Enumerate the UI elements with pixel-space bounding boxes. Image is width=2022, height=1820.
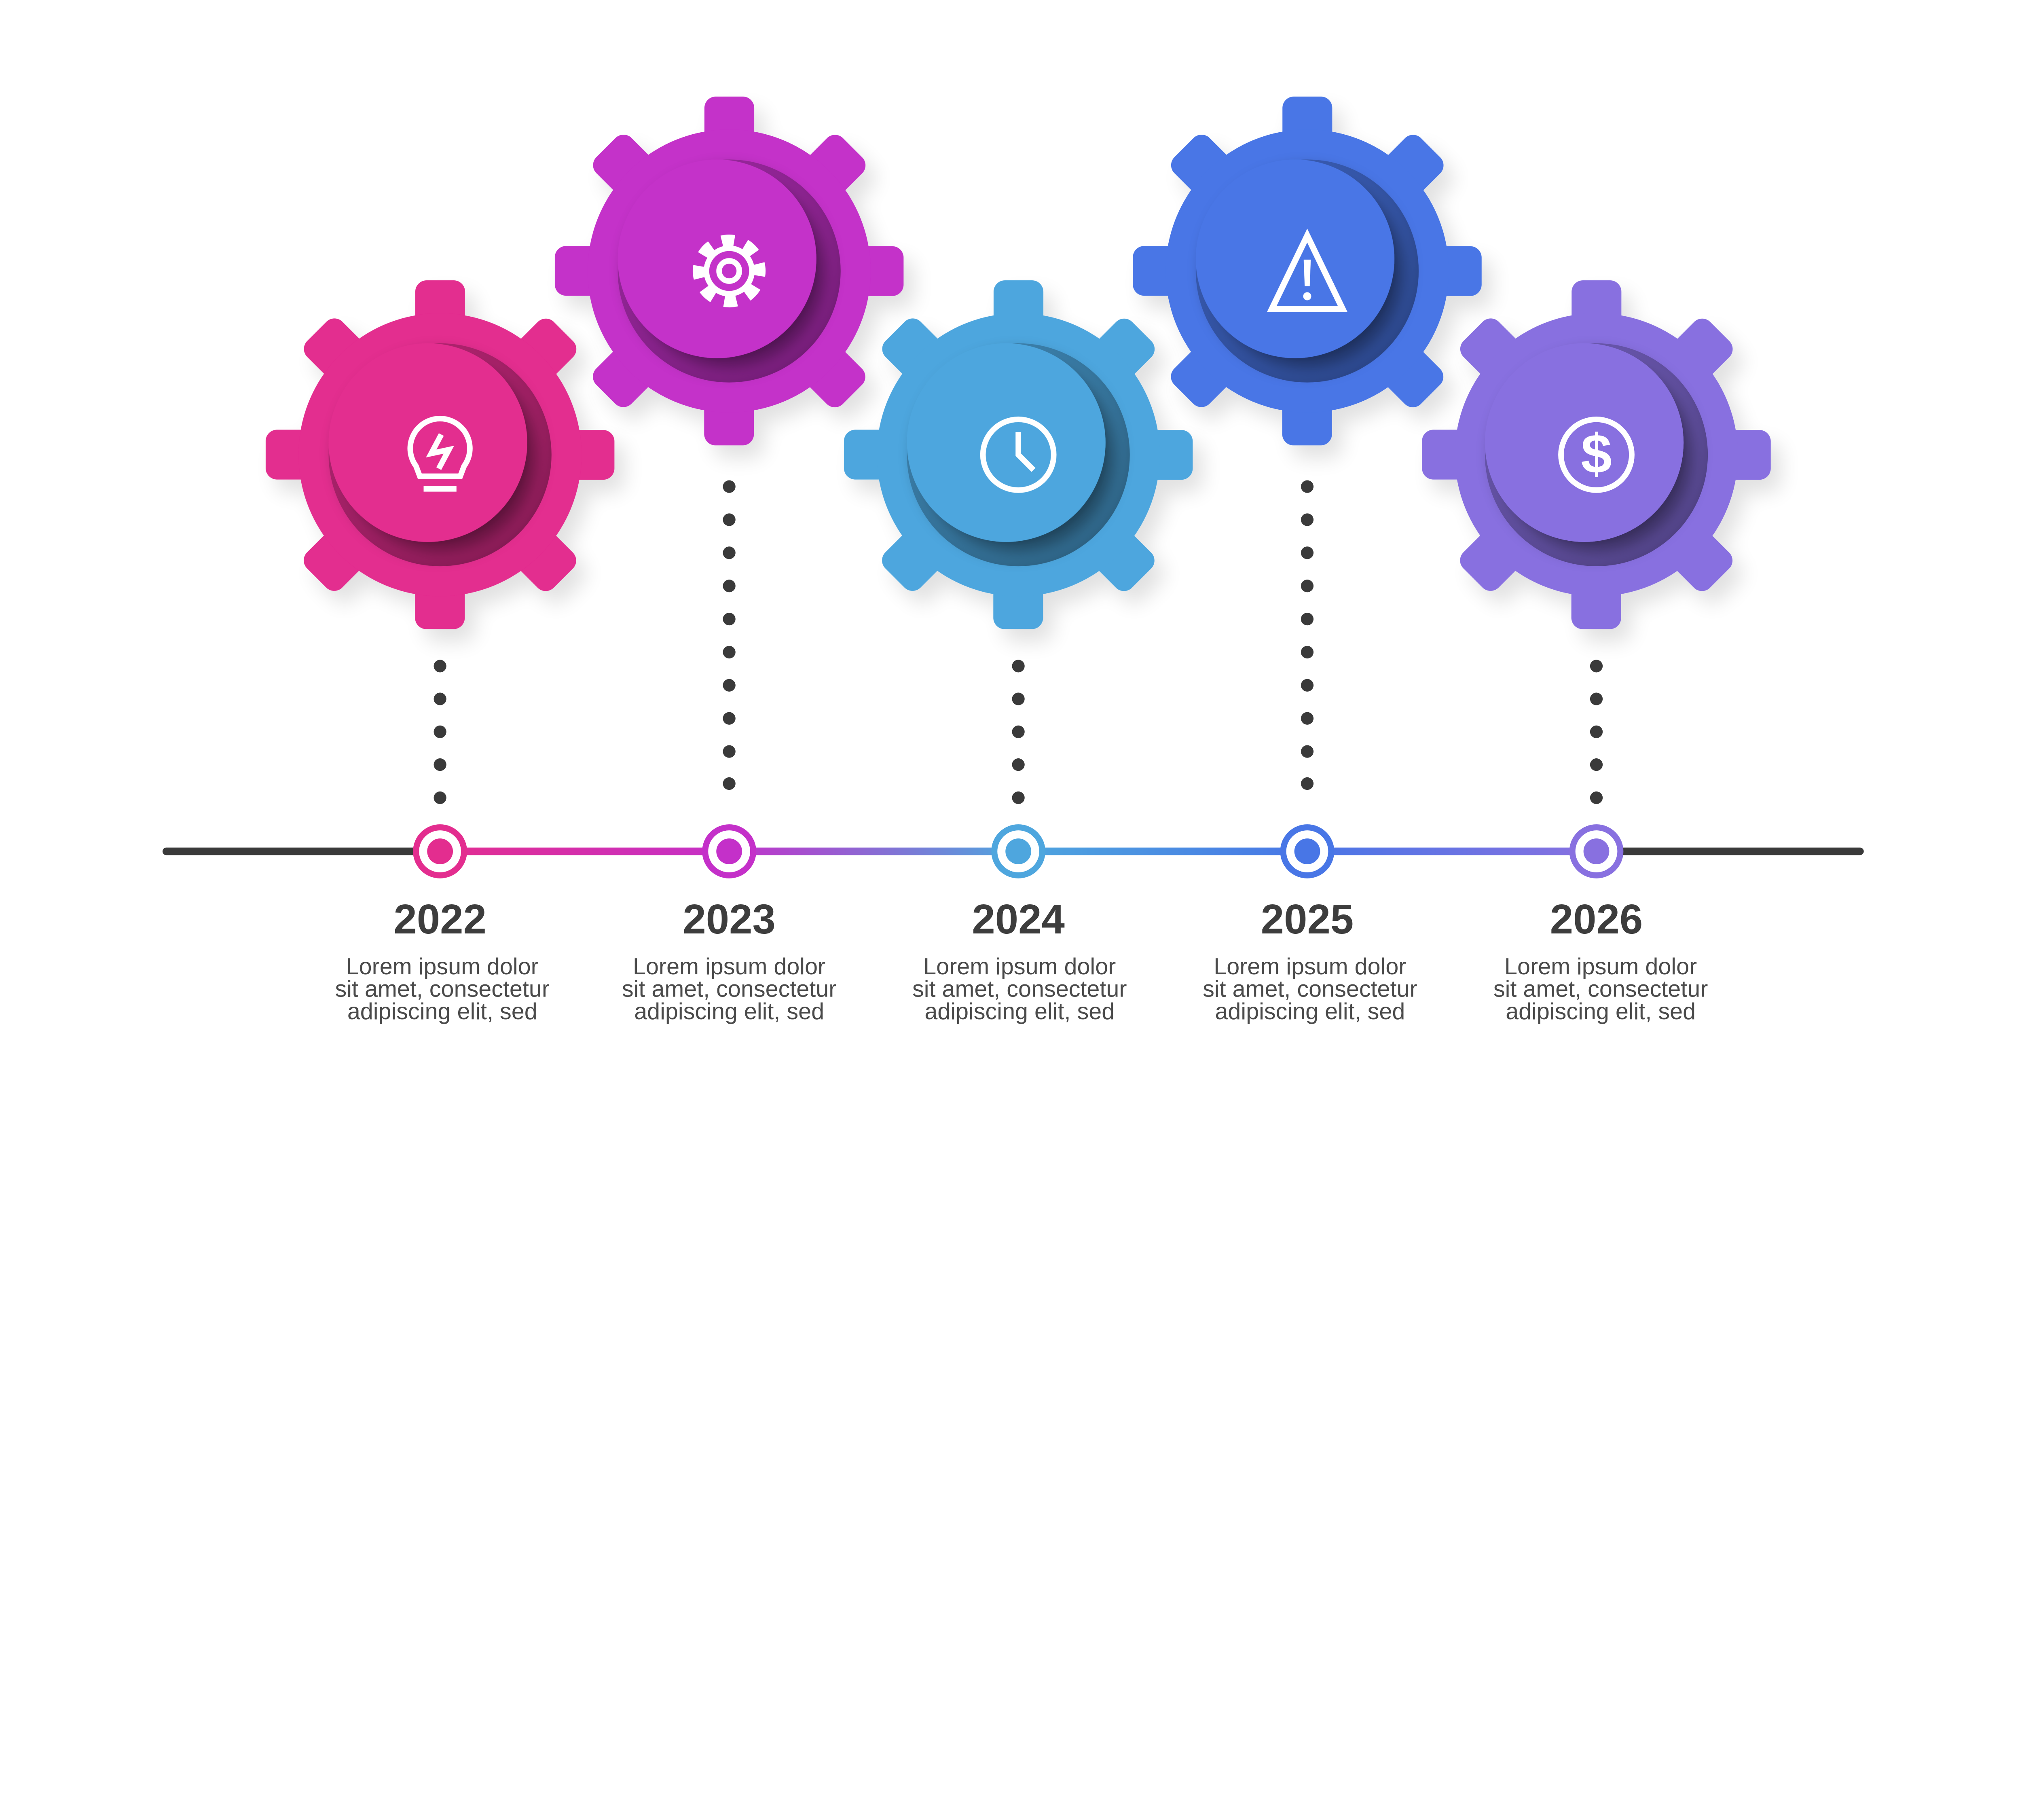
descriptions: Lorem ipsum dolor <box>1504 954 1697 980</box>
icon: cog <box>693 235 766 307</box>
timeline line <box>163 848 1864 855</box>
icon: dollar: $ <box>1581 423 1612 485</box>
descriptions: sit amet, consectetur <box>912 976 1127 1002</box>
gear 3: 2024 <box>844 280 1193 629</box>
descriptions: adipiscing elit, sed <box>347 999 537 1024</box>
descriptions: Lorem ipsum dolor <box>923 954 1116 980</box>
descriptions: Lorem ipsum dolor <box>633 954 825 980</box>
descriptions: adipiscing elit, sed <box>1506 999 1696 1024</box>
gear 5: 2026 <box>1422 280 1771 629</box>
descriptions: sit amet, consectetur <box>1203 976 1417 1002</box>
icon: clock <box>983 419 1054 490</box>
descriptions: sit amet, consectetur <box>622 976 836 1002</box>
year labels <box>393 896 1643 942</box>
descriptions <box>335 954 1708 1024</box>
gear 2: 2023 <box>555 97 903 445</box>
gear 4: 2025 <box>1133 97 1482 445</box>
descriptions: sit amet, consectetur <box>1493 976 1708 1002</box>
descriptions: Lorem ipsum dolor <box>1214 954 1406 980</box>
year labels: 2026 <box>1550 896 1643 942</box>
timeline markers <box>416 827 1620 875</box>
year labels: 2024 <box>972 896 1065 942</box>
gear 1: 2022 <box>266 280 614 629</box>
year labels: 2022 <box>393 896 486 942</box>
descriptions: Lorem ipsum dolor <box>346 954 539 980</box>
icon: dollar <box>1561 419 1632 490</box>
descriptions: adipiscing elit, sed <box>1215 999 1405 1024</box>
year labels: 2023 <box>683 896 776 942</box>
descriptions: adipiscing elit, sed <box>634 999 824 1024</box>
icon: warning <box>1272 235 1343 309</box>
icon: light bulb <box>410 419 470 489</box>
descriptions: sit amet, consectetur <box>335 976 550 1002</box>
year labels: 2025 <box>1261 896 1354 942</box>
dotted connectors <box>434 480 1603 804</box>
descriptions: adipiscing elit, sed <box>924 999 1115 1024</box>
